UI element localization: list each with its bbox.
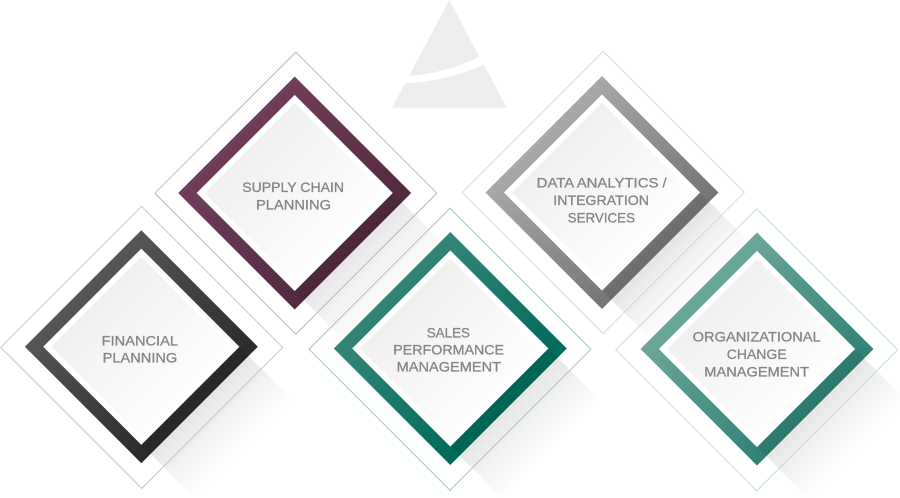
label: data analytics / integration services: SERVICES	[568, 210, 635, 226]
panel: sales performance management	[309, 208, 591, 490]
panel: supply chain planning	[155, 52, 437, 334]
label: organizational change management: ORGANIZATIONAL	[693, 329, 821, 345]
label: sales performance management: PERFORMANCE	[393, 341, 504, 357]
label: sales performance management: SALES	[427, 324, 470, 340]
label: data analytics / integration services: INTEGRATION	[553, 192, 649, 208]
label: organizational change management: MANAGEMENT	[704, 363, 809, 379]
label: data analytics / integration services: DATA ANALYTICS /	[537, 175, 667, 191]
label: supply chain planning	[242, 179, 344, 212]
label: organizational change management	[693, 329, 821, 379]
label: financial planning: PLANNING	[103, 350, 177, 366]
panel: data analytics / integration services	[462, 52, 744, 334]
logo triangle watermark	[392, 0, 507, 108]
label: sales performance management	[393, 324, 504, 375]
label: financial planning: FINANCIAL	[102, 333, 178, 349]
panel: organizational change management	[616, 209, 898, 491]
label: supply chain planning: SUPPLY CHAIN	[242, 179, 344, 195]
label: data analytics / integration services	[537, 175, 667, 226]
label: supply chain planning: PLANNING	[256, 196, 331, 212]
long shadows	[150, 202, 900, 498]
label: financial planning	[102, 333, 178, 366]
label: sales performance management: MANAGEMENT	[397, 359, 501, 375]
panel: financial planning	[1, 206, 283, 488]
label: organizational change management: CHANGE	[727, 346, 787, 362]
